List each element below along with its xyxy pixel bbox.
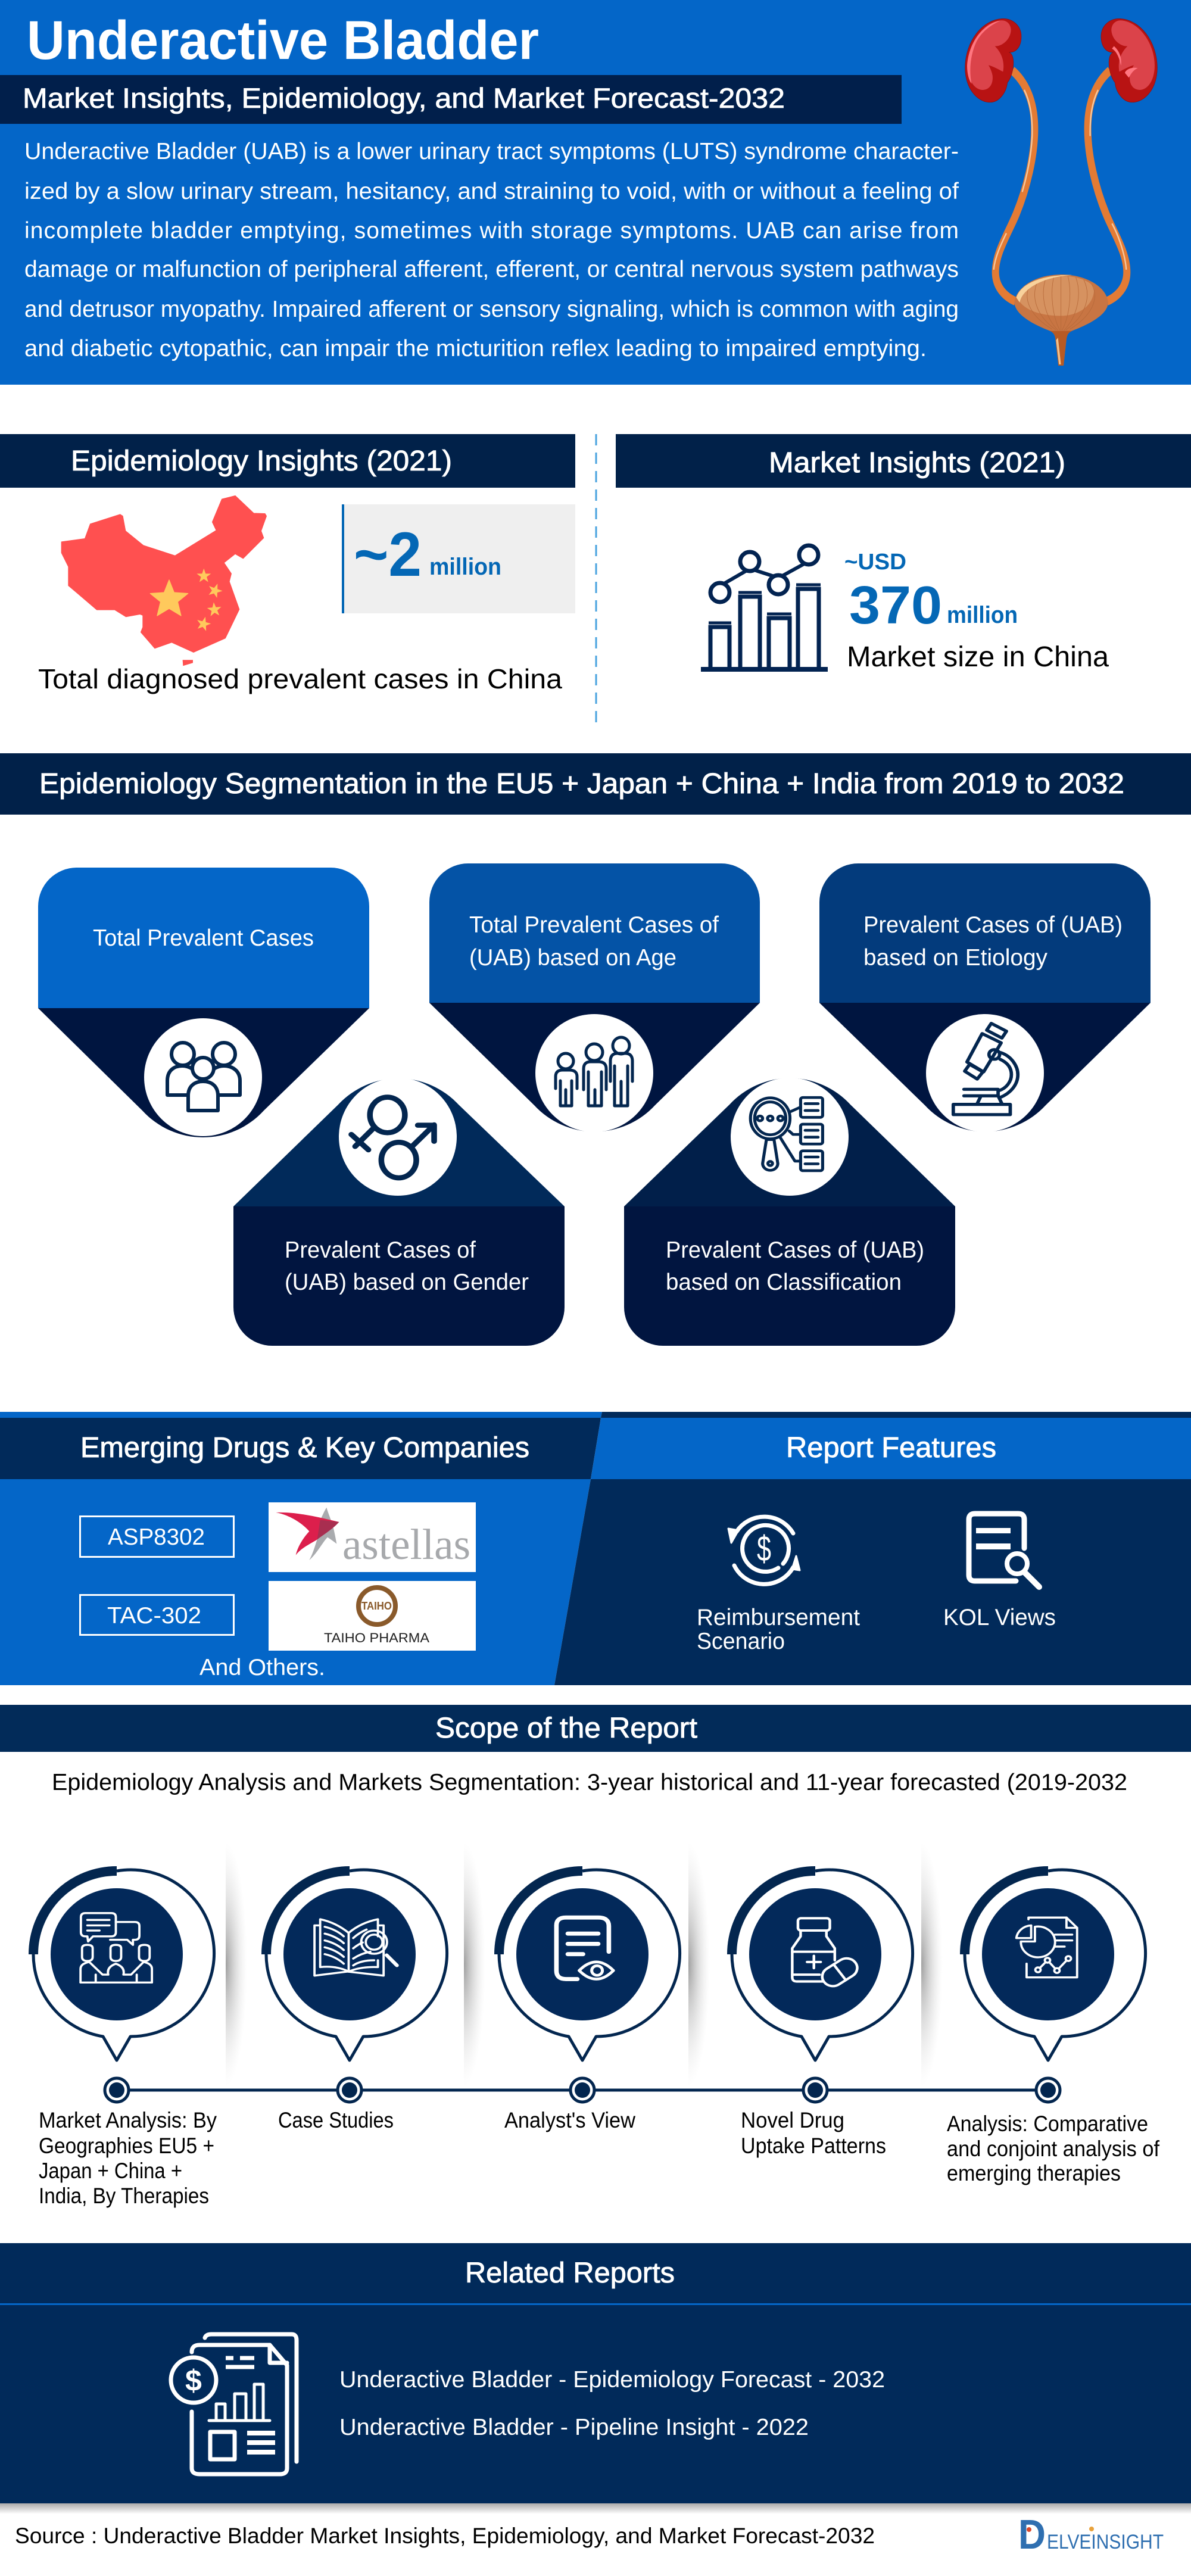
callout: USD 370 million: million bbox=[947, 602, 1018, 628]
heading: market insights bbox=[616, 434, 1191, 488]
label: emerging therapies bbox=[947, 2161, 1121, 2185]
timeline node bbox=[1036, 2078, 1060, 2102]
label: India, By Therapies bbox=[39, 2184, 209, 2208]
callout: USD 370 million: ~USD bbox=[844, 550, 906, 575]
panel: header bbox=[0, 0, 1191, 385]
pin ring bbox=[33, 1870, 214, 2060]
icon: financial report: $ bbox=[185, 2364, 202, 2397]
icon: medicine bottle and capsule bbox=[792, 1918, 861, 1990]
label: Total Prevalent Cases of bbox=[469, 912, 719, 938]
heading: epidemiology insights bbox=[0, 434, 575, 488]
label bbox=[39, 2108, 217, 2208]
timeline node bbox=[338, 2078, 361, 2102]
timeline item: analyst's view bbox=[499, 1870, 680, 2132]
panel: epidemiology insights bbox=[0, 434, 575, 694]
label: based on Etiology bbox=[863, 945, 1047, 971]
label: Prevalent Cases of (UAB) bbox=[666, 1237, 924, 1263]
text: source: Source : Underactive Bladder Market Insights, Epidemiology, and Market Forecast-2032 bbox=[15, 2524, 875, 2548]
pin ring bbox=[965, 1870, 1146, 2060]
description paragraph: and detrusor myopathy. Impaired afferent or sensory signaling, which is common with aging bbox=[24, 297, 959, 322]
logo: DelveInsight bbox=[1018, 2511, 1164, 2558]
timeline item: case studies bbox=[266, 1870, 447, 2132]
panel: report features bbox=[554, 1412, 1191, 1685]
timeline node bbox=[803, 2078, 827, 2102]
description paragraph: and diabetic cytopathic, can impair the micturition reflex leading to impaired emptying. bbox=[24, 336, 927, 361]
icon: microscope bbox=[953, 1024, 1018, 1115]
label: and conjoint analysis of bbox=[947, 2137, 1160, 2161]
icon: bar and line chart bbox=[701, 545, 828, 672]
heading: epidemiology insights: Epidemiology Insights (2021) bbox=[71, 445, 452, 477]
logo: DelveInsight: D bbox=[1018, 2511, 1046, 2558]
label: Prevalent Cases of (UAB) bbox=[863, 912, 1123, 938]
panel: prevalent cases by classification bbox=[624, 1078, 955, 1346]
label: (UAB) based on Age bbox=[469, 945, 676, 971]
callout: USD 370 million bbox=[844, 550, 1018, 635]
icon: KOL views bbox=[969, 1514, 1039, 1587]
icon: document and eye bbox=[556, 1917, 613, 1979]
timeline node bbox=[105, 2078, 129, 2102]
icon: reimbursement bbox=[728, 1517, 800, 1584]
heading: Related Reports bbox=[465, 2257, 675, 2289]
icon: discussion bbox=[80, 1913, 152, 1982]
heading: epidemiology segmentation: Epidemiology Segmentation in the EU5 + Japan + China + India from 2019 to 2032 bbox=[39, 768, 1124, 800]
callout: 2 million: ~2 bbox=[354, 520, 422, 590]
panel: market insights bbox=[616, 434, 1191, 673]
label bbox=[947, 2112, 1160, 2185]
related report links: Underactive Bladder - Epidemiology Forecast - 2032 bbox=[339, 2367, 885, 2393]
callout: USD 370 million: 370 bbox=[849, 576, 942, 635]
label: (UAB) based on Gender bbox=[285, 1270, 529, 1295]
label: Total Prevalent Cases bbox=[93, 925, 314, 951]
title: Underactive Bladder bbox=[27, 10, 539, 71]
label: Uptake Patterns bbox=[741, 2134, 886, 2158]
panel: related reports bbox=[0, 2243, 1191, 2514]
callout: 2 million: million bbox=[429, 554, 501, 580]
label bbox=[285, 1237, 529, 1295]
logo: astellas: astellas bbox=[342, 1520, 470, 1568]
panel: emerging drugs and key companies bbox=[0, 1412, 602, 1685]
pin ring bbox=[499, 1870, 680, 2060]
drug tag: ASP8302 bbox=[80, 1516, 233, 1557]
label: Prevalent Cases of bbox=[285, 1237, 476, 1263]
description paragraph: incomplete bladder emptying, sometimes with storage symptoms. UAB can arise from bbox=[24, 218, 959, 244]
timeline node bbox=[570, 2078, 594, 2102]
label: reimbursement scenario: Reimbursement bbox=[697, 1605, 860, 1630]
heading: scope of the report bbox=[0, 1705, 1191, 1752]
icon: report with charts bbox=[1017, 1917, 1077, 1978]
label: Japan + China + bbox=[39, 2159, 182, 2183]
logo: taiho pharma: TAIHO bbox=[361, 1600, 392, 1612]
icon: magnifier with lists bbox=[750, 1097, 822, 1171]
icon: kidneys and bladder bbox=[965, 18, 1157, 366]
drug tag: TAC-302: TAC-302 bbox=[107, 1603, 201, 1629]
related report links: Underactive Bladder - Pipeline Insight - 2022 bbox=[339, 2415, 809, 2440]
icon: China map bbox=[61, 496, 266, 666]
heading: market insights: Market Insights (2021) bbox=[769, 447, 1065, 479]
label: Geographies EU5 + bbox=[39, 2134, 214, 2158]
label: based on Classification bbox=[666, 1270, 902, 1295]
panel: prevalent cases by etiology bbox=[819, 863, 1151, 1132]
panel: prevalent cases by age bbox=[429, 863, 760, 1132]
description paragraph: damage or malfunction of peripheral afferent, efferent, or central nervous system pathways bbox=[24, 257, 959, 282]
drug tag: TAC-302 bbox=[80, 1595, 233, 1635]
label: Analyst's View bbox=[504, 2108, 635, 2132]
label: Market Analysis: By bbox=[39, 2108, 217, 2132]
subtitle bar: Market Insights, Epidemiology, and Market Forecast-2032 bbox=[23, 82, 785, 114]
panel: prevalent cases by gender bbox=[233, 1078, 565, 1346]
pin ring bbox=[732, 1870, 913, 2060]
logo: astellas bbox=[269, 1502, 476, 1572]
timeline item: market analysis bbox=[33, 1870, 217, 2208]
description paragraph: Underactive Bladder (UAB) is a lower urinary tract symptoms (LUTS) syndrome character- bbox=[24, 139, 959, 164]
icon: age group people bbox=[556, 1037, 632, 1106]
label: KOL views: KOL Views bbox=[943, 1605, 1056, 1630]
heading: scope of the report: Scope of the Report bbox=[435, 1713, 697, 1744]
pin ring bbox=[266, 1870, 447, 2060]
description paragraph bbox=[24, 139, 959, 361]
logo: taiho pharma bbox=[269, 1581, 476, 1651]
heading: Report Features bbox=[786, 1432, 996, 1464]
text: market size: Market size in China bbox=[847, 641, 1109, 673]
label: Novel Drug bbox=[741, 2108, 844, 2132]
label bbox=[469, 912, 719, 971]
icon: financial report bbox=[171, 2334, 297, 2474]
icon: book and magnifier bbox=[314, 1919, 397, 1976]
timeline item: novel drug uptake bbox=[732, 1870, 913, 2158]
text: scope subtitle: Epidemiology Analysis and Markets Segmentation: 3-year historical and 11-year forecasted (2019-2032 bbox=[52, 1770, 1127, 1795]
icon: reimbursement: $ bbox=[757, 1529, 771, 1568]
timeline item: comparative analysis bbox=[947, 1870, 1160, 2185]
icon: people bbox=[167, 1043, 240, 1111]
logo: DelveInsight: ELVEINSIGHT bbox=[1047, 2531, 1164, 2553]
label bbox=[666, 1237, 924, 1295]
label: reimbursement scenario bbox=[697, 1605, 860, 1654]
label: reimbursement scenario: Scenario bbox=[697, 1629, 785, 1654]
text: total diagnosed prevalent cases: Total diagnosed prevalent cases in China bbox=[38, 663, 562, 694]
text: and others: And Others. bbox=[199, 1655, 325, 1680]
callout: 2 million bbox=[342, 504, 575, 613]
heading: Emerging Drugs & Key Companies bbox=[80, 1432, 529, 1464]
label: Case Studies bbox=[278, 2108, 394, 2132]
related report links bbox=[339, 2367, 885, 2440]
heading: epidemiology segmentation bbox=[0, 753, 1191, 815]
icon: gender symbols bbox=[351, 1097, 434, 1178]
logo: taiho pharma: TAIHO PHARMA bbox=[324, 1630, 429, 1645]
label bbox=[741, 2108, 886, 2158]
label: Analysis: Comparative bbox=[947, 2112, 1148, 2136]
subtitle bar bbox=[0, 75, 902, 124]
description paragraph: ized by a slow urinary stream, hesitancy, and straining to void, with or without a feeling of bbox=[24, 179, 959, 204]
panel: total prevalent cases bbox=[38, 868, 369, 1137]
drug tag: ASP8302: ASP8302 bbox=[108, 1524, 205, 1550]
label bbox=[863, 912, 1123, 971]
